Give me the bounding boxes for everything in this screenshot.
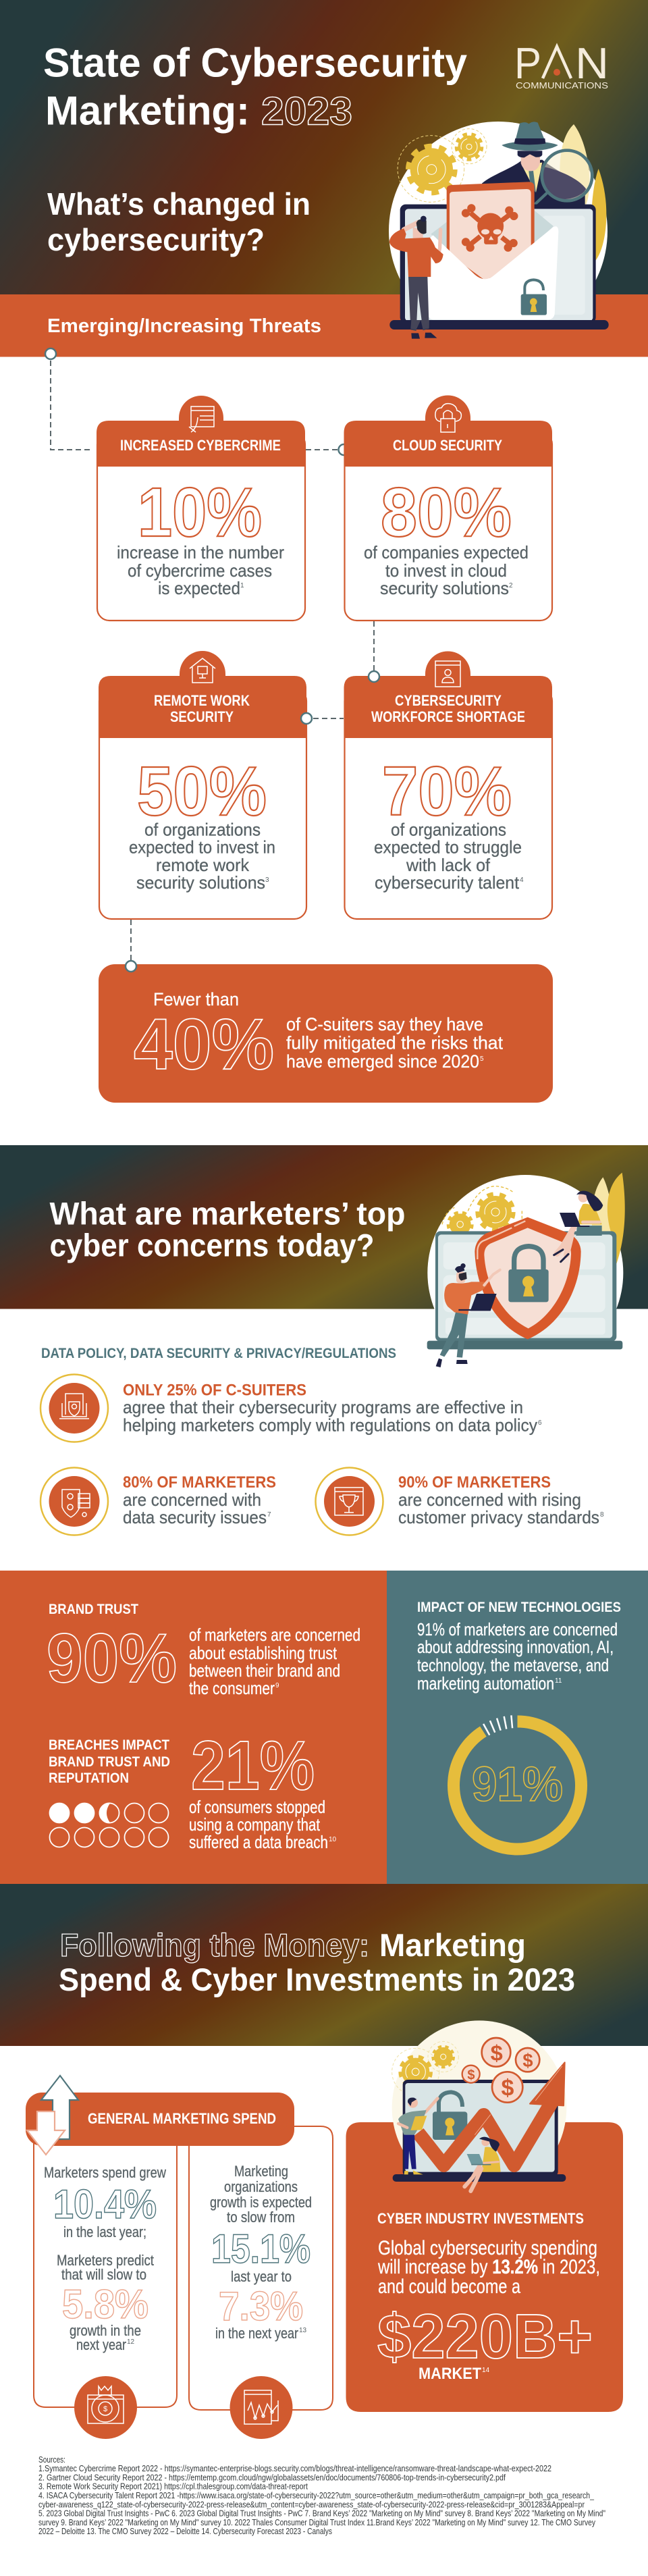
text: next year: in the next year — [215, 2325, 298, 2342]
technologies description: 11 — [555, 1677, 562, 1685]
donut chart: 91 percent: 91% — [472, 1758, 563, 1812]
stat: 7.3%: 7.3% — [219, 2284, 303, 2329]
card heading: REMOTE WORK — [154, 692, 250, 709]
sources: 1.Symantec Cybercrime Report 2022 - https://symantec-enterprise-blogs.security.com/blogs/threat-intelligence/ransomware-threat-landscape-what-expect-2022 — [38, 2463, 551, 2473]
brand trust description: the consumer — [189, 1678, 275, 1698]
panel: general marketing spend columns — [34, 2126, 333, 2410]
sources: Sources: — [38, 2454, 65, 2465]
text: growth: next year — [76, 2336, 126, 2353]
brand trust description: of marketers are concerned — [189, 1625, 360, 1645]
stat description: 4 — [520, 876, 524, 884]
stat description: of companies expected — [364, 542, 529, 562]
sources: 3. Remote Work Security Report 2021) https://cpl.thalesgroup.com/data-threat-report — [38, 2481, 308, 2492]
item text: are concerned with — [123, 1490, 261, 1510]
card heading — [371, 692, 525, 725]
section header panel: following the money — [0, 1884, 648, 2046]
item text: helping marketers comply with regulations on data policy — [123, 1415, 537, 1436]
title: State of Cybersecurity — [43, 41, 468, 85]
woman with laptop — [464, 2137, 501, 2191]
heading: top cyber concerns: What are marketers’ top — [50, 1195, 405, 1232]
illustration: shield, lock and two users — [427, 1173, 625, 1371]
text: predict: that will slow to — [61, 2266, 146, 2283]
card heading: WORKFORCE SHORTAGE — [371, 708, 525, 725]
stat description: of cybercrime cases — [128, 560, 272, 581]
donut chart: 91 percent — [454, 1715, 581, 1849]
stat description: security solutions — [380, 578, 509, 598]
icon: cloud lock — [435, 404, 461, 432]
sources — [38, 2454, 605, 2536]
subheading: data policy: DATA POLICY, DATA SECURITY & PRIVACY/REGULATIONS — [41, 1346, 396, 1361]
brand trust description: about establishing trust — [189, 1643, 338, 1663]
breaches description: of consumers stopped — [189, 1797, 325, 1817]
stat description — [364, 542, 529, 598]
heading: brand trust: BRAND TRUST — [49, 1602, 138, 1617]
stat: 10.4%: 10.4% — [53, 2182, 157, 2227]
connector: header to increased cybercrime — [45, 348, 90, 450]
coins: $ — [502, 2076, 514, 2101]
breaches description: 10 — [329, 1836, 337, 1843]
text: last year: in the last year; — [63, 2224, 146, 2240]
section header panel: concerns — [0, 1145, 648, 1309]
logo: PAN Communications: N — [575, 38, 609, 88]
illustration backdrop: white circle — [389, 122, 608, 340]
icon: home with monitor — [190, 658, 215, 683]
stat description — [117, 542, 284, 598]
icon: trophy in window — [335, 1488, 363, 1515]
text: growth: growth in the — [70, 2322, 141, 2339]
pictogram: 21 percent dots — [50, 1803, 169, 1847]
item text: agree that their cybersecurity programs are effective in — [123, 1397, 523, 1417]
item text: 8 — [600, 1511, 604, 1519]
stat description: 1 — [240, 582, 244, 589]
woman with laptop — [554, 1191, 603, 1262]
text: growth — [70, 2322, 141, 2353]
stat description: increase in the number — [117, 542, 284, 562]
stat description: 3 — [265, 876, 269, 884]
item text: are concerned with rising — [398, 1490, 581, 1510]
item text — [123, 1473, 276, 1527]
heading: cyber industry: CYBER INDUSTRY INVESTMENTS — [377, 2210, 584, 2227]
item: 90% of marketers — [316, 1468, 604, 1535]
connector: remote work to callout — [130, 920, 132, 960]
item text: 6 — [538, 1419, 542, 1427]
man with tablet — [398, 2098, 437, 2174]
panel: cyber industry investments — [346, 2122, 623, 2412]
icon: up and down arrows — [27, 2076, 78, 2155]
icon: chart on tablet — [230, 2376, 293, 2439]
right column content — [210, 2163, 312, 2342]
card: increased cybercrime — [97, 396, 305, 621]
card: cloud security — [344, 396, 552, 621]
card: cybersecurity workforce shortage — [344, 651, 552, 919]
stat: 50%: 50% — [137, 752, 267, 830]
text: predict: Marketers predict — [57, 2252, 154, 2269]
stat: 80%: 80% — [381, 473, 512, 551]
icon: money bag in window: $ — [103, 2405, 107, 2413]
icon: web hook — [189, 406, 214, 432]
icon: shield with server — [62, 1490, 90, 1517]
item text — [123, 1382, 542, 1436]
item text — [398, 1473, 604, 1527]
connector: workforce to remote work — [301, 671, 379, 724]
callout description: fully mitigated the risks that — [286, 1033, 503, 1053]
heading: breaches: BRAND TRUST AND — [49, 1754, 170, 1770]
brand trust description: 9 — [275, 1682, 279, 1689]
stat: 15.1%: 15.1% — [211, 2226, 310, 2271]
stat description: expected to struggle — [374, 837, 522, 858]
card heading: INCREASED CYBERCRIME — [120, 437, 281, 454]
connector: cybercrime to cloud — [306, 444, 350, 455]
coins — [462, 2038, 539, 2103]
breaches description: suffered a data breach — [189, 1832, 328, 1852]
title: 2023 — [261, 89, 352, 134]
heading: breaches: BREACHES IMPACT — [49, 1737, 169, 1753]
breaches description: using a company that — [189, 1814, 321, 1835]
item text: ONLY 25% OF C-SUITERS — [123, 1382, 306, 1399]
sources: 2. Gartner Cloud Security Report 2022 - https://emtemp.gcom.cloud/ngw/globalassets/en/doc/documents/760806-top-trends-in-cybersecurity2.pdf — [38, 2472, 506, 2482]
heading: following the money: Spend & Cyber Investments in 2023 — [59, 1962, 575, 1997]
card heading — [154, 692, 250, 725]
spending description — [377, 2237, 600, 2298]
stat: 21%: 21% — [191, 1727, 315, 1804]
heading: top cyber concerns: cyber concerns today? — [50, 1228, 374, 1263]
text: growth: 12 — [127, 2338, 135, 2346]
icon: laptop with shield — [59, 1394, 89, 1419]
right column content: Marketing — [234, 2163, 288, 2180]
item text: 80% OF MARKETERS — [123, 1473, 276, 1492]
stat description: expected to invest in — [129, 837, 275, 858]
stat description: to invest in cloud — [385, 560, 507, 581]
brand trust description — [189, 1625, 360, 1698]
market label: MARKET — [418, 2365, 481, 2383]
panel: impact of new technologies — [387, 1571, 648, 1884]
heading: breaches: REPUTATION — [49, 1770, 129, 1786]
right column content: organizations — [224, 2178, 298, 2195]
heading: top cyber concerns — [50, 1195, 405, 1263]
logo: PAN Communications: COMMUNICATIONS — [516, 81, 608, 90]
spending description: and could become a — [378, 2276, 520, 2298]
coins: $ — [467, 2068, 475, 2082]
card heading: CYBERSECURITY — [395, 692, 502, 709]
heading: what's changed — [47, 186, 310, 257]
stat description: with lack of — [406, 855, 491, 875]
heading: what's changed: What’s changed in — [47, 186, 310, 221]
banner: general marketing spend: GENERAL MARKETING SPEND — [88, 2110, 276, 2127]
breaches description — [189, 1797, 337, 1852]
connector: cloud to workforce — [373, 621, 375, 671]
card heading: CLOUD SECURITY — [393, 437, 502, 454]
spending description: will increase by 13.2% in 2023, — [377, 2256, 600, 2278]
icon: money bag in window — [74, 2376, 137, 2439]
callout: fewer than 40%: Fewer than — [153, 989, 239, 1009]
stat description: remote work — [156, 855, 250, 875]
stat description: 2 — [509, 582, 513, 589]
text: predict — [57, 2252, 154, 2283]
panel: brand trust and breaches — [0, 1571, 387, 1884]
callout description: 5 — [480, 1055, 484, 1063]
brand trust description: between their brand and — [189, 1660, 340, 1681]
callout description — [286, 1014, 503, 1072]
item text: customer privacy standards — [398, 1507, 599, 1527]
heading: following the money — [59, 1927, 575, 1997]
text: last year to: last year to — [231, 2268, 292, 2285]
stat description — [129, 820, 275, 893]
title — [43, 41, 468, 134]
heading: new technologies: IMPACT OF NEW TECHNOLOGIES — [417, 1600, 621, 1615]
illustration: hacker and infected email on laptop — [389, 122, 609, 339]
man with laptop — [436, 1263, 500, 1367]
card: remote work security — [99, 651, 306, 919]
stat: 40%: 40% — [134, 1003, 274, 1084]
right column content: to slow from — [227, 2209, 295, 2226]
logo: PAN Communications: P — [514, 38, 541, 88]
title: Marketing: — [45, 88, 250, 134]
header panel: gradient background — [0, 0, 648, 294]
stat: 70%: 70% — [382, 752, 512, 830]
heading: following the money: Marketing — [379, 1927, 526, 1963]
left column content — [44, 2164, 166, 2353]
stat description: of organizations — [391, 820, 506, 840]
emerging threats band — [0, 294, 648, 357]
callout: fewer than 40% — [99, 961, 553, 1103]
stat description: of organizations — [144, 820, 261, 840]
item text: data security issues — [123, 1507, 267, 1527]
item text: 7 — [267, 1511, 271, 1519]
callout description: of C-suiters say they have — [286, 1014, 483, 1034]
item: 80% of marketers — [40, 1468, 276, 1535]
stat: 90%: 90% — [47, 1619, 177, 1697]
sources: 2022 – Deloitte 13. The CMO Survey 2022 – Deloitte 14. Cybersecurity Forecast 2023 - Canalys — [38, 2526, 332, 2536]
heading: following the money: Following the Money: — [60, 1927, 369, 1963]
stat description: cybersecurity talent — [375, 872, 520, 893]
stat: $220B+: $220B+ — [377, 2301, 593, 2371]
technologies description — [417, 1619, 618, 1693]
item text: 90% OF MARKETERS — [398, 1473, 551, 1492]
callout description: have emerged since 2020 — [286, 1051, 479, 1072]
illustration: cash, rising chart and laptop — [392, 2020, 566, 2195]
right column content: growth is expected — [210, 2194, 312, 2211]
coins: $ — [522, 2050, 533, 2071]
stat: 5.8%: 5.8% — [62, 2282, 148, 2327]
emerging threats band: Emerging/Increasing Threats — [47, 315, 321, 337]
logo: PAN Communications — [514, 38, 609, 90]
stat description: security solutions — [136, 872, 265, 893]
left column content: Marketers spend grew — [44, 2164, 166, 2181]
spending description: Global cybersecurity spending — [378, 2237, 597, 2259]
market label: 14 — [482, 2367, 490, 2374]
stat description: is expected — [158, 578, 240, 598]
stat: 10%: 10% — [138, 473, 262, 551]
heading: breaches — [49, 1737, 170, 1786]
heading: what's changed: cybersecurity? — [47, 222, 265, 257]
icon: window with person — [435, 661, 460, 687]
banner: general marketing spend — [26, 2093, 294, 2146]
stat description — [374, 820, 524, 893]
coins: $ — [491, 2041, 503, 2066]
text: next year: 13 — [299, 2327, 307, 2334]
item: only 25% of C-suiters — [40, 1375, 542, 1442]
technologies description: marketing automation — [417, 1673, 554, 1693]
card heading: SECURITY — [170, 708, 234, 725]
